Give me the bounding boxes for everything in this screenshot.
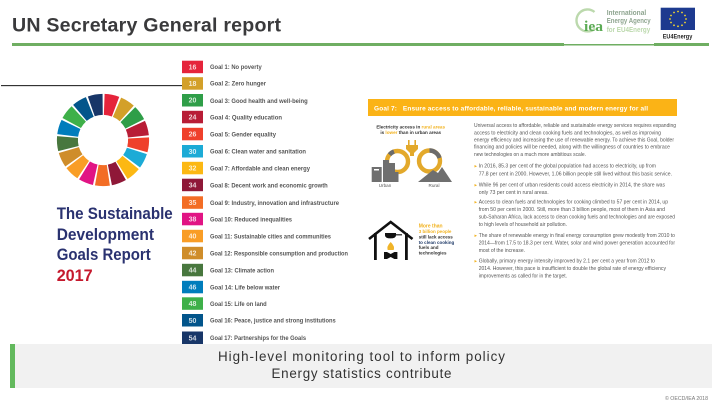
- title: UN Secretary General report: [12, 15, 281, 37]
- goal 10: 38: [189, 217, 196, 224]
- text block: goal 7 bullets: improvements as called for in the target.: [479, 273, 567, 279]
- text block: goal 7 bullets: [474, 163, 675, 279]
- callout: 3 billion people: fuels and: [419, 245, 439, 250]
- logo caption: EU4Energy: [663, 35, 693, 41]
- text block: goal 7 summary: energy efficiency and increasing the use of renewable energy. To achieve this Goal, bolder: [474, 137, 674, 143]
- goal 7: [182, 162, 311, 174]
- goal 9: Goal 9: Industry, innovation and infrastructure: [210, 200, 340, 207]
- goal 13: 44: [189, 268, 196, 275]
- text block: goal 7 summary: financing and policies will be needed, along with the willingness of countries to embrace: [474, 145, 670, 151]
- goal 12: [182, 247, 348, 259]
- logo: IEA for EU4Energy: for EU4Energy: [607, 27, 650, 34]
- caption: [376, 124, 445, 135]
- goal 6: Goal 6: Clean water and sanitation: [210, 149, 306, 156]
- goal 4: [182, 111, 282, 123]
- goal 14: 46: [189, 285, 196, 292]
- goal 17: [182, 332, 307, 344]
- text block: goal 7 summary: Universal access to affordable, reliable and sustainable energy services requires expanding: [474, 123, 676, 129]
- goal 17: 54: [189, 335, 196, 342]
- report title: The Sustainable: [57, 205, 173, 223]
- goal 11: Goal 11: Sustainable cities and communities: [210, 234, 332, 240]
- label: rural: Rural: [429, 183, 439, 188]
- goal 14: [182, 281, 281, 293]
- text block: goal 7 bullets: ▸: [474, 259, 478, 265]
- text block: goal 7 bullets: only 73 per cent in rural areas.: [479, 190, 549, 196]
- goal 14: Goal 14: Life below water: [210, 284, 281, 292]
- callout: 3 billion people: to clean cooking: [419, 240, 454, 245]
- goal 10: [182, 213, 293, 225]
- text block: goal 7 bullets: most of the increase.: [479, 248, 525, 254]
- goal 7: 32: [189, 166, 196, 173]
- text block: goal 7 bullets: ▸: [474, 233, 478, 239]
- report title: [57, 205, 173, 285]
- goal 5: [182, 128, 277, 140]
- goal 4: 24: [189, 115, 196, 122]
- panel: goal 7 banner: Goal 7: Ensure access to affordable, reliable, sustainable and modern energy for all: [374, 105, 648, 112]
- goal 3: Goal 3: Good health and well-being: [210, 98, 308, 105]
- report title: 2017: [57, 267, 93, 285]
- goal 6: [182, 145, 306, 158]
- caption: Electricity access in rural areas: [376, 124, 445, 129]
- goal 1: Goal 1: No poverty: [210, 64, 262, 71]
- goal 12: 42: [189, 251, 196, 258]
- text block: goal 7 summary: access to electricity and clean cooking fuels and technologies, as well as improving: [474, 130, 661, 136]
- text block: goal 7 bullets: Access to clean fuels and technologies for cooking climbed to 57 per cent in 2014, up: [479, 200, 668, 206]
- goal 17: Goal 17: Partnerships for the Goals: [210, 335, 307, 342]
- report title: Goals Report: [57, 246, 151, 264]
- goal 9: 35: [189, 200, 196, 207]
- goal 8: Goal 8: Decent work and economic growth: [210, 182, 328, 189]
- icon: house with stove: [369, 222, 412, 260]
- caption: is lower than in urban areas: [380, 130, 442, 135]
- goal 12: Goal 12: Responsible consumption and production: [210, 250, 348, 258]
- infographic: clean cooking: [369, 222, 454, 260]
- icon: city buildings: [372, 160, 398, 182]
- goal 3: 20: [189, 98, 196, 105]
- goal 2: 18: [189, 81, 196, 88]
- goal 2: [182, 77, 267, 90]
- text block: goal 7 bullets: While 96 per cent of urban residents could access electricity in 2014, the share was: [479, 183, 665, 189]
- goals list: [182, 61, 348, 344]
- goal 8: 34: [189, 182, 196, 190]
- text block: goal 7 bullets: sub-Saharan Africa, lack access to clean cooking fuels and technologies and are exposed: [479, 215, 675, 221]
- text block: goal 7 bullets: ▸: [474, 183, 478, 189]
- text block: goal 7 bullets: from 50 per cent in 2000. Still, more than 3 billion people, most of them in Asia and: [479, 207, 665, 213]
- logo: IEA for EU4Energy: iea: [584, 19, 604, 35]
- callout: 3 billion people: 3 billion people: [419, 229, 452, 234]
- text block: goal 7 bullets: 2014—from 17.5 to 18.3 per cent. Water, solar and wind power generation accounted for: [479, 240, 675, 246]
- goal 16: Goal 16: Peace, justice and strong institutions: [210, 318, 336, 325]
- goal 1: 16: [189, 64, 196, 71]
- goal 7: Goal 7: Affordable and clean energy: [210, 166, 311, 172]
- goal 5: Goal 5: Gender equality: [210, 132, 277, 138]
- logo: IEA for EU4Energy: Energy Agency: [607, 18, 651, 25]
- goal 4: Goal 4: Quality education: [210, 114, 282, 122]
- text block: goal 7 summary: [474, 123, 676, 158]
- goal 5: 26: [189, 132, 196, 139]
- report title: Development: [57, 226, 154, 244]
- goal 13: [182, 264, 274, 276]
- goal 11: 40: [189, 234, 196, 241]
- infographic: electricity access: [372, 124, 452, 188]
- panel: key message: [10, 344, 712, 388]
- goal 11: [182, 230, 332, 242]
- text block: goal 7 bullets: ▸: [474, 163, 478, 169]
- goal 10: Goal 10: Reduced inequalities: [210, 216, 293, 224]
- header rule: [12, 43, 709, 46]
- icon: mountain: [418, 167, 452, 182]
- icon: urban donut: [387, 151, 408, 172]
- callout: 3 billion people: More than: [419, 224, 443, 230]
- text block: goal 7 bullets: 77.8 per cent in 2000. However, 1.06 billion people still lived without this basic service.: [479, 171, 672, 177]
- text block: goal 7 bullets: Globally, primary energy intensity improved by 2.1 per cent a year from 2012 to: [479, 259, 655, 265]
- SDG colour wheel: [53, 90, 153, 190]
- goal 1: [182, 61, 262, 73]
- text block: goal 7 bullets: In 2016, 85.3 per cent of the global population had access to electricity, up from: [479, 163, 656, 169]
- callout: 3 billion people: technologies: [419, 250, 447, 255]
- icon: rural donut: [419, 150, 440, 172]
- goal 6: 30: [189, 149, 196, 156]
- logo: IEA for EU4Energy: [576, 9, 651, 35]
- logo: EU flag: [661, 8, 695, 30]
- text block: goal 7 summary: new technologies on a much more ambitious scale.: [474, 152, 586, 158]
- text block: goal 7 bullets: to high levels of household air pollution.: [479, 222, 567, 228]
- text block: goal 7 bullets: ▸: [474, 200, 478, 206]
- text block: goal 7 bullets: 2014. However, this pace is insufficient to double the global rate of energy efficiency: [479, 266, 666, 272]
- panel: goal 7 banner: [368, 99, 677, 116]
- goal 13: Goal 13: Climate action: [210, 268, 274, 274]
- goal 3: [182, 94, 308, 106]
- copyright: © OECD/IEA 2018: [665, 395, 708, 402]
- key message line 2: Energy statistics contribute: [272, 366, 452, 381]
- goal 16: 50: [189, 318, 196, 325]
- goal 8: [182, 179, 328, 191]
- goal 15: 48: [189, 301, 196, 308]
- icon: plug: [406, 140, 418, 156]
- callout: 3 billion people: still lack access: [419, 234, 453, 239]
- key message line 1: High-level monitoring tool to inform policy: [218, 349, 505, 364]
- label: urban: Urban: [379, 183, 392, 188]
- pointer line to goals list: [1, 85, 182, 87]
- callout: 3 billion people: [419, 224, 454, 255]
- goal 9: [182, 196, 340, 209]
- text block: goal 7 bullets: The share of renewable energy in final energy consumption grew modestly from 2010 to: [479, 233, 675, 239]
- logo: IEA for EU4Energy: International: [607, 10, 646, 17]
- goal 16: [182, 314, 336, 326]
- goal 15: Goal 15: Life on land: [210, 301, 267, 308]
- goal 15: [182, 297, 267, 310]
- goal 2: Goal 2: Zero hunger: [210, 81, 267, 88]
